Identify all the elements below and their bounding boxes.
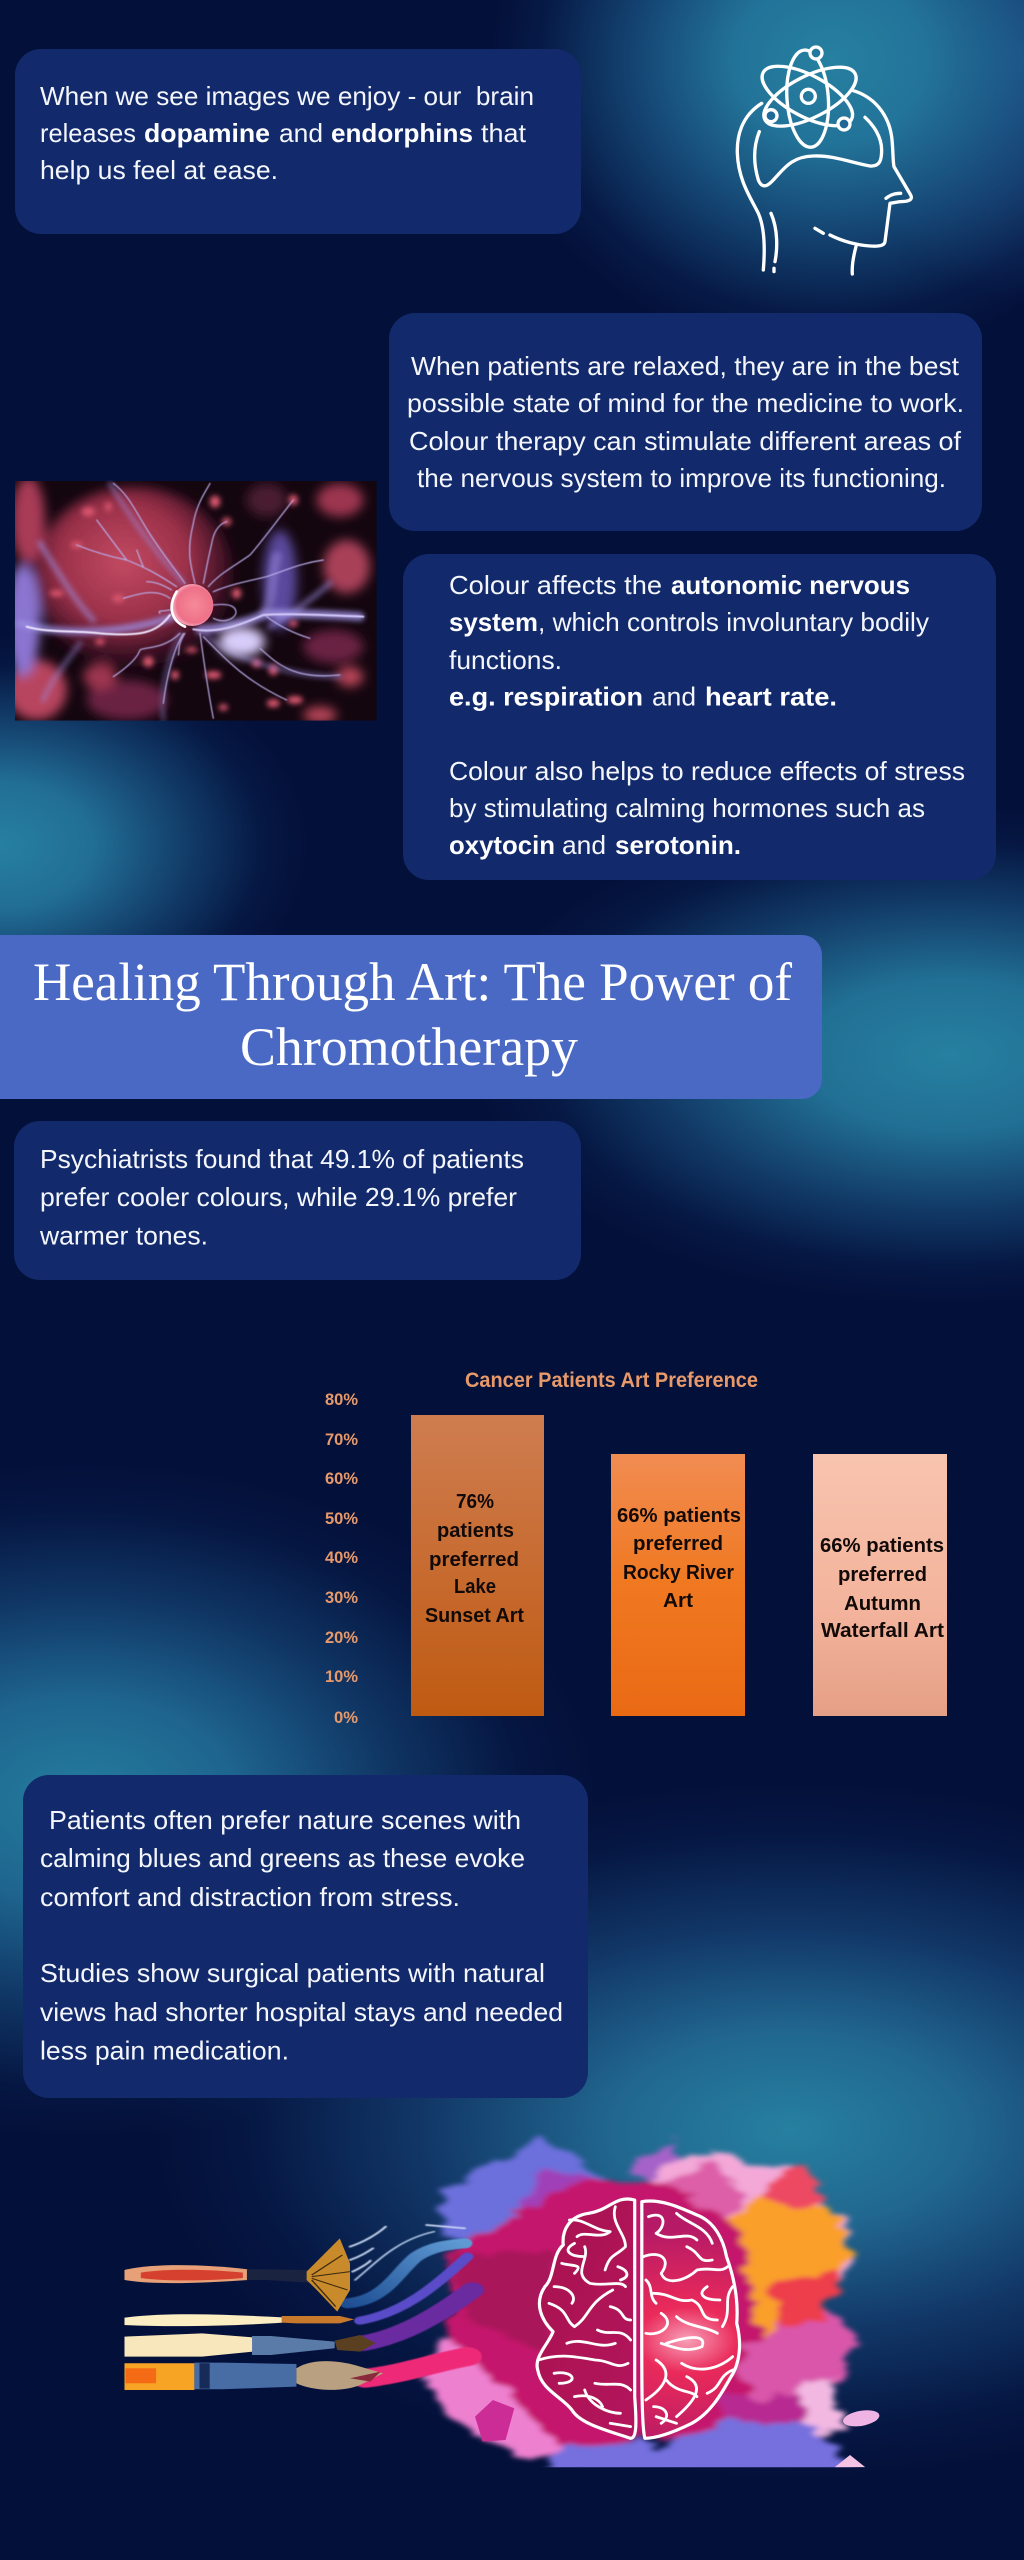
- illustration: paint brushes and watercolour brain: [124, 2140, 883, 2477]
- panel: nature scenes and surgical patients: Patients often prefer nature scenes with: [49, 1805, 521, 1835]
- brush: large orange brush: [124, 2361, 383, 2390]
- bar: Rocky River Art 66%: preferred: [633, 1533, 723, 1555]
- panel: dopamine and endorphins: and: [279, 118, 323, 148]
- y axis labels: 10%: [325, 1667, 358, 1686]
- panel: autonomic nervous system: Colour also helps to reduce effects of stress: [449, 756, 965, 786]
- brush: flat brush: [124, 2333, 376, 2357]
- bar: Lake Sunset Art 76%: [411, 1415, 544, 1716]
- y axis labels: 70%: [325, 1430, 358, 1449]
- panel: patients relaxed: [389, 313, 982, 531]
- y axis labels: [325, 1390, 358, 1727]
- panel: autonomic nervous system: by stimulating calming hormones such as: [449, 793, 925, 823]
- brush: fan brush: [124, 2238, 350, 2312]
- bar: Rocky River Art 66%: 66% patients: [617, 1505, 741, 1527]
- panel: nature scenes and surgical patients: Studies show surgical patients with natural: [40, 1958, 545, 1988]
- bar: Lake Sunset Art 76%: preferred: [429, 1549, 519, 1571]
- title: [0, 935, 822, 1099]
- panel: autonomic nervous system: e.g. respiration: [449, 682, 643, 712]
- y axis labels: 20%: [325, 1628, 358, 1647]
- chart title: Cancer Patients Art Preference: [465, 1369, 758, 1392]
- bar: Autumn Waterfall Art 66%: preferred: [838, 1564, 927, 1586]
- panel: patients relaxed: When patients are relaxed, they are in the best: [411, 351, 960, 381]
- panel: patients relaxed: possible state of mind for the medicine to work.: [407, 388, 964, 418]
- panel: cool and warm colour preference: Psychiatrists found that 49.1% of patients: [40, 1144, 524, 1174]
- panel: autonomic nervous system: , which controls involuntary bodily: [538, 607, 929, 637]
- icon: glowing cell core: [171, 584, 213, 626]
- bar: Autumn Waterfall Art 66%: Waterfall Art: [821, 1620, 944, 1642]
- panel: autonomic nervous system: Colour affects the: [449, 570, 662, 600]
- panel: dopamine and endorphins: When we see images we enjoy - our brain: [40, 81, 534, 111]
- bar: Lake Sunset Art 76%: 76%: [456, 1491, 494, 1513]
- panel: autonomic nervous system: heart rate.: [705, 682, 837, 712]
- paint strokes: [347, 2225, 472, 2378]
- y axis labels: 30%: [325, 1588, 358, 1607]
- panel: dopamine and endorphins: dopamine: [144, 118, 270, 148]
- panel: patients relaxed: the nervous system to improve its functioning.: [417, 463, 946, 493]
- bar: Rocky River Art 66%: Rocky River: [623, 1562, 734, 1584]
- panel: cool and warm colour preference: warmer tones.: [39, 1220, 208, 1250]
- panel: patients relaxed: Colour therapy can stimulate different areas of: [409, 426, 962, 456]
- panel: cool and warm colour preference: [14, 1121, 581, 1280]
- panel: nature scenes and surgical patients: calming blues and greens as these evoke: [40, 1843, 525, 1873]
- panel: dopamine and endorphins: that: [481, 118, 527, 148]
- title: Chromotherapy: [240, 1017, 578, 1077]
- panel: autonomic nervous system: and: [652, 682, 696, 712]
- bar: Lake Sunset Art 76%: Lake: [454, 1576, 496, 1598]
- bar: Rocky River Art 66%: Art: [663, 1590, 693, 1612]
- panel: dopamine and endorphins: [15, 49, 581, 234]
- watercolour splash: [421, 2140, 883, 2477]
- image: plasma nerve cell: [7, 477, 377, 723]
- panel: dopamine and endorphins: releases: [40, 118, 136, 148]
- y axis labels: 0%: [334, 1708, 358, 1727]
- panel: autonomic nervous system: and: [562, 830, 606, 860]
- panel: cool and warm colour preference: prefer cooler colours, while 29.1% prefer: [40, 1182, 517, 1212]
- panel: nature scenes and surgical patients: less pain medication.: [40, 2036, 289, 2066]
- bar: Autumn Waterfall Art 66%: 66% patients: [820, 1535, 944, 1557]
- panel: dopamine and endorphins: help us feel at ease.: [40, 155, 278, 185]
- panel: autonomic nervous system: oxytocin: [449, 830, 555, 860]
- panel: autonomic nervous system: autonomic nervous: [671, 570, 910, 600]
- bar: Lake Sunset Art 76%: Sunset Art: [425, 1605, 524, 1627]
- panel: autonomic nervous system: serotonin.: [615, 830, 741, 860]
- title: Healing Through Art: The Power of: [33, 952, 792, 1012]
- panel: autonomic nervous system: system: [449, 607, 538, 637]
- brush: thin round brush: [124, 2314, 354, 2326]
- panel: autonomic nervous system: [403, 554, 996, 880]
- brain outline: [537, 2199, 740, 2438]
- bar: Autumn Waterfall Art 66%: [813, 1454, 947, 1716]
- panel: nature scenes and surgical patients: comfort and distraction from stress.: [40, 1882, 460, 1912]
- panel: nature scenes and surgical patients: [23, 1775, 588, 2098]
- panel: autonomic nervous system: functions.: [449, 645, 562, 675]
- panel: nature scenes and surgical patients: views had shorter hospital stays and needed: [40, 1997, 563, 2027]
- icon: head with atom: [737, 47, 911, 274]
- bar: Rocky River Art 66%: [611, 1454, 745, 1716]
- y axis labels: 80%: [325, 1390, 358, 1409]
- bar: Autumn Waterfall Art 66%: Autumn: [844, 1593, 921, 1615]
- y axis labels: 50%: [325, 1509, 358, 1528]
- bar chart: cancer patients art preference: [325, 1369, 947, 1727]
- y axis labels: 60%: [325, 1469, 358, 1488]
- panel: dopamine and endorphins: endorphins: [331, 118, 473, 148]
- y axis labels: 40%: [325, 1548, 358, 1567]
- bar: Lake Sunset Art 76%: patients: [437, 1520, 514, 1542]
